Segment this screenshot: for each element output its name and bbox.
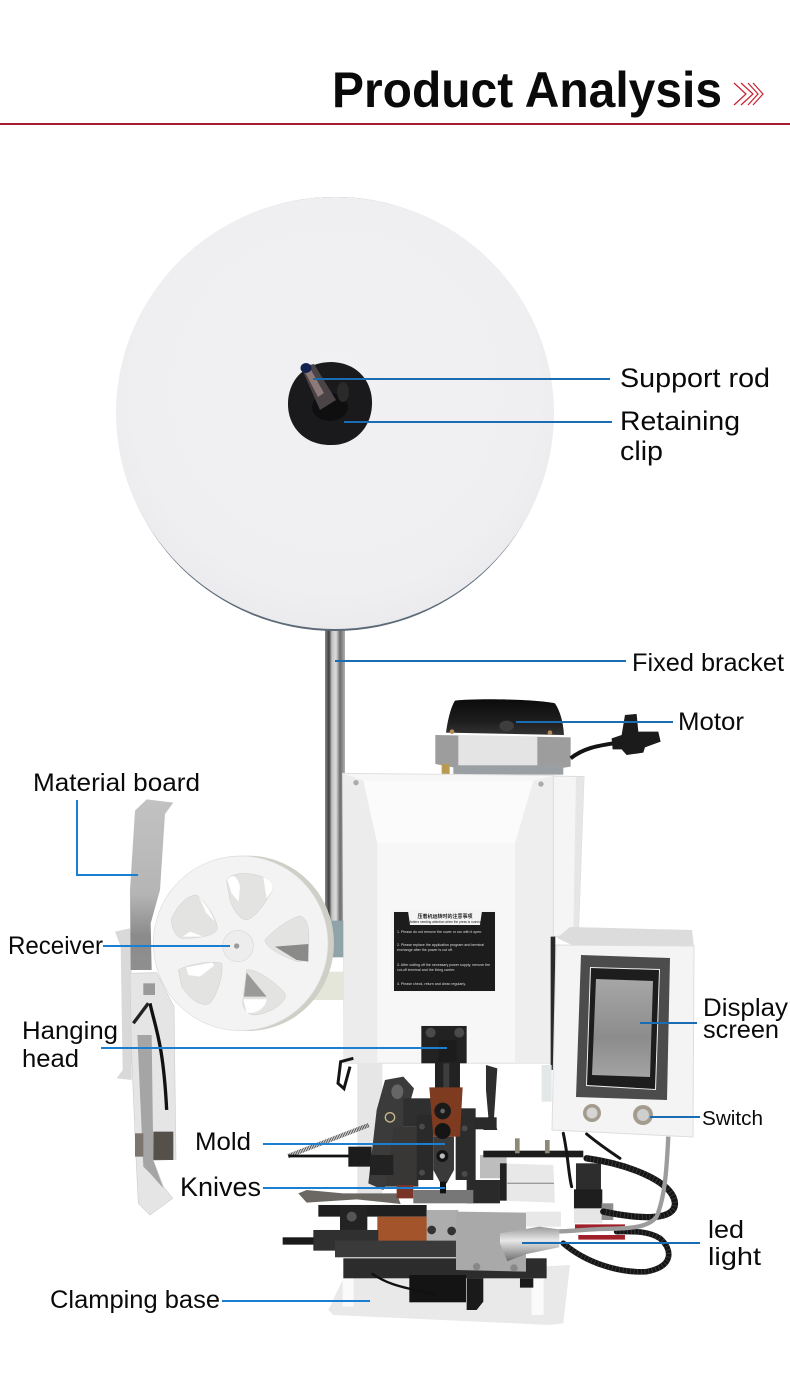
label: support rod: Support rod bbox=[620, 363, 770, 393]
warning label: 1. Please do not remove the cover or run with it open. bbox=[397, 930, 482, 934]
motor assembly bbox=[435, 699, 661, 775]
spring bbox=[288, 1125, 393, 1175]
warning label: 2. Please replace the application program and terminal bbox=[397, 943, 484, 947]
label: led light bbox=[522, 1216, 761, 1271]
retaining clip bbox=[288, 362, 372, 445]
label: knives: Knives bbox=[180, 1172, 261, 1202]
applicator linkage bbox=[475, 1117, 497, 1129]
buttons bbox=[583, 1104, 653, 1125]
warning label: cut-off terminal and the fixing carrier. bbox=[397, 968, 455, 972]
link arm bbox=[483, 1065, 497, 1130]
support rod bbox=[300, 363, 336, 410]
left arm bbox=[368, 1077, 414, 1190]
red tubes bbox=[575, 1220, 625, 1234]
motor dome bbox=[446, 699, 564, 735]
left plate bbox=[115, 928, 132, 1080]
main machine body bbox=[343, 773, 584, 1070]
warning label: 3. After cutting off the necessary power supply, remove the bbox=[397, 963, 490, 967]
label: display screen bbox=[640, 994, 789, 1044]
motor cable and connector bbox=[571, 714, 661, 758]
label: hanging head: Hanging bbox=[22, 1017, 118, 1045]
label: receiver: Receiver bbox=[8, 932, 103, 960]
label: hanging head: head bbox=[22, 1045, 79, 1073]
fixed bracket rod bbox=[325, 625, 345, 930]
warning label: Matters needing attention when the press is running bbox=[408, 920, 482, 924]
frame columns bbox=[357, 1063, 382, 1197]
receiver wheel bbox=[153, 856, 334, 1031]
label: retaining clip bbox=[344, 406, 740, 466]
clamping base plate bbox=[328, 1265, 570, 1325]
lower bracket bbox=[130, 973, 176, 1215]
label: display screen: screen bbox=[703, 1016, 779, 1044]
motor base block bbox=[435, 735, 571, 775]
warning label: 4. Please check, return and clean regularly. bbox=[397, 982, 466, 986]
bottom slide bars bbox=[283, 1230, 547, 1310]
valve bbox=[574, 1163, 613, 1223]
cable loop bbox=[338, 1058, 353, 1089]
display screen bbox=[576, 955, 670, 1100]
gooseneck bbox=[550, 1137, 668, 1232]
warning label: 压着机运转时的注意事项 bbox=[417, 913, 473, 920]
material board assembly bbox=[115, 799, 176, 1215]
label: retaining clip: clip bbox=[620, 436, 663, 466]
label: switch bbox=[650, 1108, 763, 1130]
warning label bbox=[391, 909, 496, 992]
label: display screen: Display bbox=[703, 994, 789, 1022]
label: fixed bracket: Fixed bracket bbox=[632, 649, 784, 677]
label: motor: Motor bbox=[678, 708, 744, 736]
warning label: exchange after the power is cut off. bbox=[397, 948, 453, 952]
cables bbox=[563, 1133, 675, 1272]
label: material board: Material board bbox=[33, 769, 200, 797]
label: led light: light bbox=[708, 1243, 761, 1271]
lower frame and base bbox=[328, 1058, 570, 1325]
label: clamping base: Clamping base bbox=[50, 1286, 220, 1314]
receiver mount bbox=[313, 921, 344, 1000]
textured pad bbox=[385, 1127, 418, 1187]
feed block row bbox=[318, 1205, 458, 1243]
label: retaining clip: Retaining bbox=[620, 406, 740, 436]
label: mold: Mold bbox=[195, 1128, 251, 1156]
mold bbox=[417, 1087, 476, 1183]
display panel bbox=[552, 927, 694, 1137]
knives strip bbox=[298, 1182, 473, 1204]
label: hanging head bbox=[22, 1017, 447, 1073]
icon: chevrons bbox=[734, 83, 763, 105]
crimping mechanism bbox=[283, 1040, 675, 1310]
steel slide plate bbox=[456, 1212, 561, 1272]
large reel disc bbox=[116, 197, 554, 631]
title: Product Analysis bbox=[332, 62, 722, 118]
label: switch: Switch bbox=[702, 1108, 763, 1130]
led head bbox=[500, 1227, 559, 1261]
material board bbox=[130, 799, 173, 970]
pneumatic cylinder bbox=[467, 1138, 583, 1203]
header rule bbox=[0, 123, 790, 125]
label: led light: led bbox=[708, 1216, 744, 1244]
label: material board bbox=[33, 769, 200, 875]
spoke windows bbox=[172, 874, 309, 1015]
hanging head ram bbox=[435, 1040, 460, 1092]
